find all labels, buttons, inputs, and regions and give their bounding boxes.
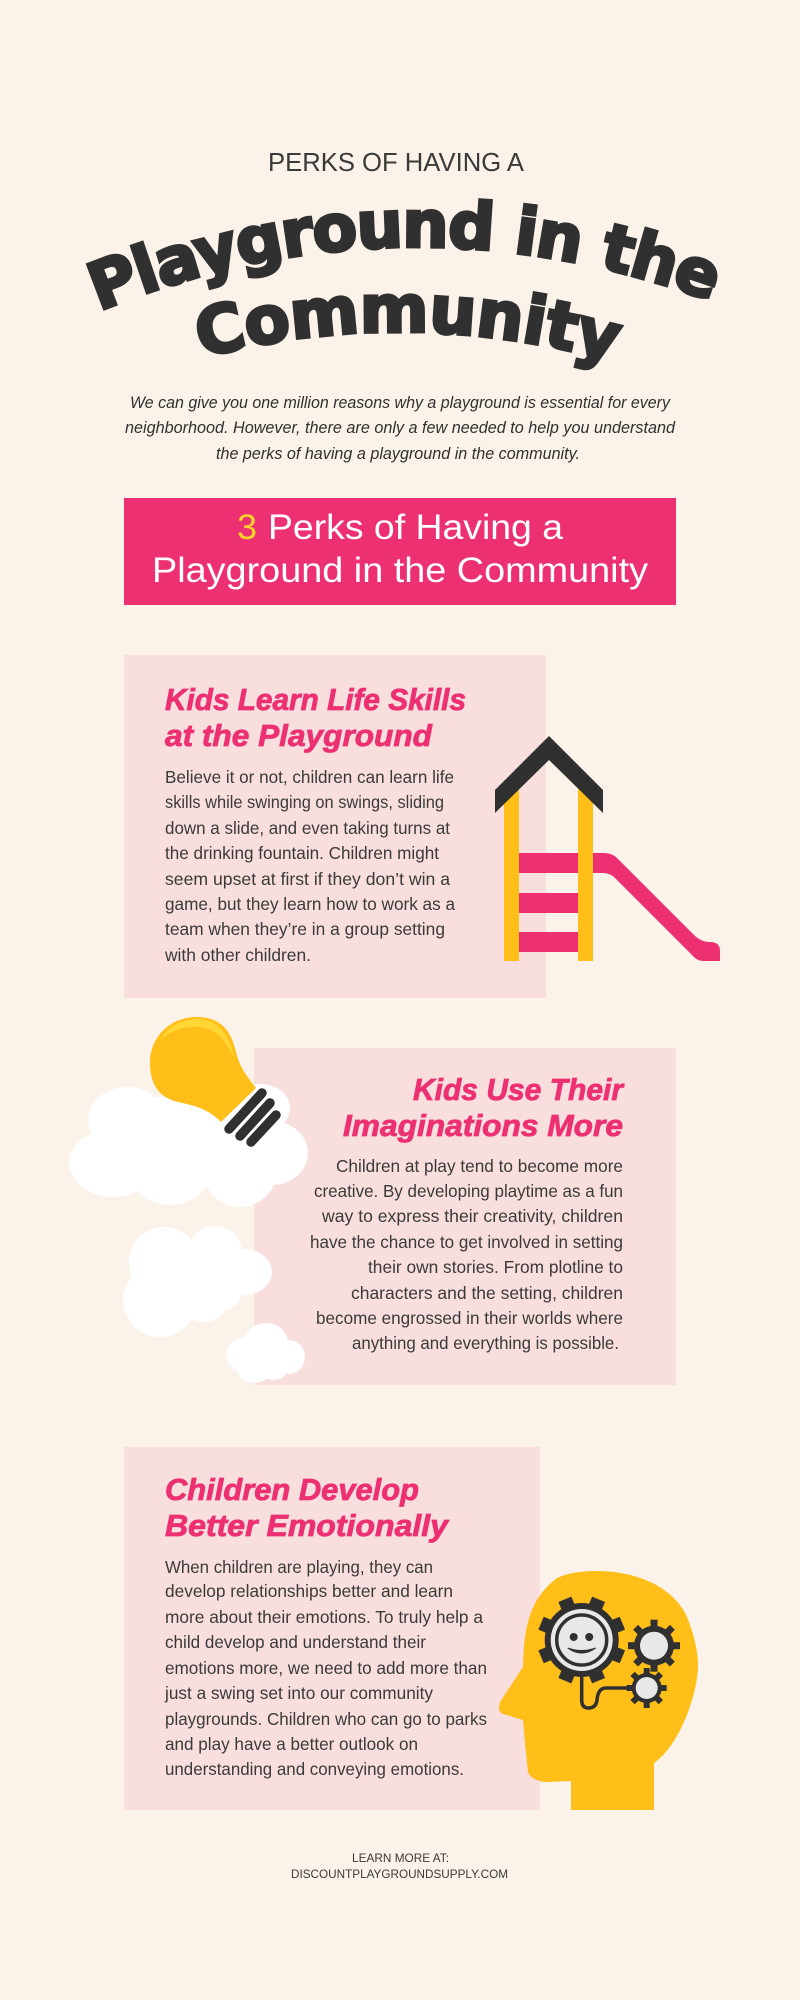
body text: imaginations [310,1156,623,1353]
body text: emotionally: and play have a better outlook on [165,1734,418,1754]
title: arched headline [86,198,718,370]
panel: children develop emotionally [124,1447,540,1810]
footer: DISCOUNTPLAYGROUNDSUPPLY.COM [291,1867,508,1881]
heading: emotionally: Children Develop [165,1472,419,1507]
big gear with smiley [538,1597,625,1683]
icon: small cloud [226,1323,305,1383]
body text: emotionally: emotions more, we need to add more than [165,1658,487,1678]
title: arched headline: Community [196,291,624,370]
heading: imaginations: Imaginations More [343,1108,623,1143]
upper small gear [628,1620,680,1672]
banner: 3 perks heading: 3 [237,508,257,547]
body text: imaginations: creative. By developing playtime as a fun [314,1181,623,1201]
body text: imaginations: characters and the setting, children [351,1283,623,1303]
panel: kids learn life skills [124,655,546,998]
heading: emotionally: Better Emotionally [165,1508,450,1543]
intro paragraph: We can give you one million reasons why a playground is essential for every [130,393,671,412]
body text: imaginations: their own stories. From plotline to [368,1257,623,1277]
icon: head with gears [499,1571,698,1810]
title: arched headline: Playground in the [86,198,718,311]
banner: 3 perks heading [124,498,676,605]
eyebrow heading: PERKS OF HAVING A [268,149,524,177]
body text: life skills: Believe it or not, children can learn life [165,767,454,787]
panel: kids use imaginations [254,1048,676,1385]
body text: emotionally: more about their emotions. To truly help a [165,1607,483,1627]
body text: emotionally: develop relationships better and learn [165,1581,453,1601]
body text: life skills: down a slide, and even taking turns at [165,818,450,838]
body text: emotionally: child develop and understand their [165,1632,426,1652]
banner: 3 perks heading: Perks of Having a [268,508,564,547]
icon: large cloud [69,1084,308,1207]
body text: emotionally: just a swing set into our community [164,1683,433,1703]
footer: LEARN MORE AT: [352,1851,449,1865]
heading: life skills [165,682,466,753]
body text: life skills: the drinking fountain. Children might [165,843,439,863]
body text: imaginations: become engrossed in their worlds where [316,1308,623,1328]
body text: life skills: game, but they learn how to work as a [165,894,455,914]
body text: life skills: seem upset at first if they don’t win a [165,869,450,889]
body text: emotionally: playgrounds. Children who can go to parks [165,1709,487,1729]
banner: 3 perks heading: Playground in the Community [152,551,649,590]
body text: life skills: with other children. [164,945,311,965]
body text: emotionally: When children are playing, they can [165,1557,433,1577]
footer [291,1851,508,1881]
icon: light bulb [150,1017,276,1142]
body text: emotionally: understanding and conveying emotions. [165,1759,464,1779]
intro paragraph: neighborhood. However, there are only a few needed to help you understand [125,418,676,437]
body text: life skills [164,767,455,965]
body text: imaginations: Children at play tend to become more [336,1156,623,1176]
body text: imaginations: anything and everything is possible. [352,1333,619,1353]
lower small gear and connector [582,1668,667,1708]
body text: imaginations: way to express their creativity, children [321,1206,623,1226]
heading: life skills: Kids Learn Life Skills [165,682,466,717]
icon: playground slide [495,736,720,961]
heading: emotionally [165,1472,450,1543]
intro paragraph [125,393,676,463]
body text: imaginations: have the chance to get involved in setting [310,1232,623,1252]
body text: life skills: team when they’re in a group setting [165,919,445,939]
heading: life skills: at the Playground [165,718,433,753]
heading: imaginations: Kids Use Their [413,1072,625,1107]
intro paragraph: the perks of having a playground in the community. [216,444,580,463]
icon: medium cloud [123,1226,272,1337]
body text: life skills: skills while swinging on swings, sliding [165,792,444,812]
heading: imaginations [343,1072,625,1143]
body text: emotionally [164,1557,487,1779]
